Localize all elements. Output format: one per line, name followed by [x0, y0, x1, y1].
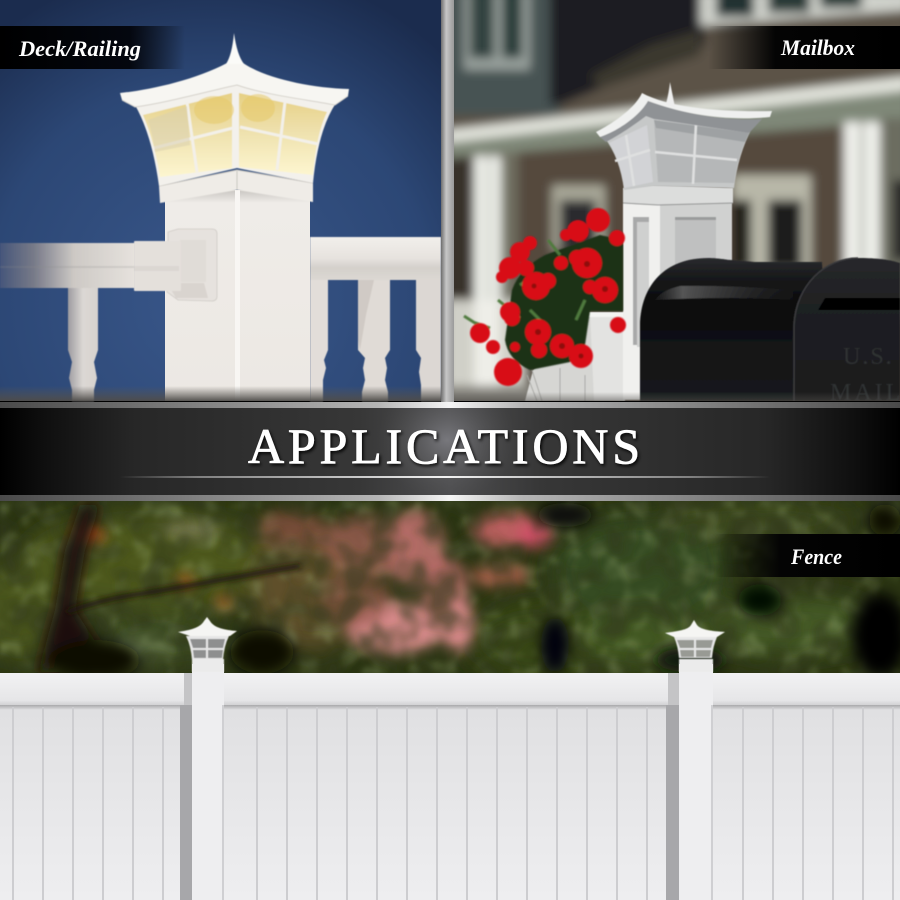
- right rail with balusters: [310, 237, 441, 401]
- post: [165, 190, 310, 401]
- icon: glowing solar post cap: [120, 33, 349, 203]
- label: mailbox: [708, 26, 900, 69]
- fence post right: [666, 664, 713, 900]
- banner: applications: [0, 402, 900, 501]
- label: deck/railing: [0, 26, 185, 69]
- divider: [441, 0, 454, 402]
- fence cap rails: [0, 673, 900, 705]
- heading: APPLICATIONS: [248, 418, 640, 474]
- planter: [525, 312, 625, 401]
- house background: [445, 0, 900, 410]
- blurred foliage background: [0, 500, 900, 680]
- label: deck/railing: Deck/Railing: [18, 36, 141, 61]
- floor fade: [454, 393, 900, 401]
- embossed mail lettering: U.S.: [843, 344, 894, 370]
- rail bracket: [134, 229, 217, 301]
- solar post: [623, 185, 733, 400]
- panel: fence scene: [0, 500, 900, 900]
- icon: left fence post cap: [178, 617, 237, 672]
- icon: right fence post cap: [665, 620, 725, 672]
- label: fence: Fence: [790, 544, 842, 569]
- mailbox: [640, 258, 900, 406]
- label: fence: [715, 534, 900, 577]
- flowers: [464, 208, 626, 386]
- floor fade: [0, 386, 441, 401]
- fence boards: [0, 705, 900, 900]
- left rail with baluster: [0, 243, 135, 401]
- label: mailbox: Mailbox: [780, 35, 855, 60]
- fence post left: [180, 664, 224, 900]
- panel: mailbox scene: [445, 0, 900, 410]
- icon: daytime solar post cap: [596, 82, 772, 190]
- panel: deck/railing: [0, 0, 441, 401]
